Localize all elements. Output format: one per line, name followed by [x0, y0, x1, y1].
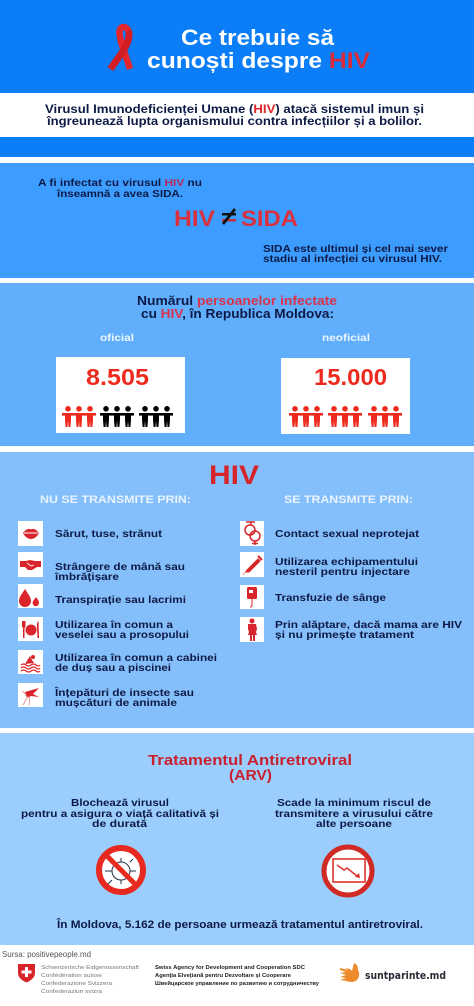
item: handshake: îmbrățișare	[54, 572, 119, 583]
icon: swiss shield	[18, 964, 35, 982]
text: Moldova count: În Moldova, 5.162 de persoane urmează tratamentul antiretroviral.	[56, 918, 423, 931]
text: blocks the virus: de durată	[92, 818, 147, 830]
item: syringe: nesteril pentru injectare	[275, 567, 410, 578]
item: breastfeeding mother	[240, 617, 462, 642]
text: HIV is not AIDS: înseamnă a avea SIDA.	[56, 189, 183, 200]
text: swiss agency: Agenția Elvețiană pentru Dezvoltare și Cooperare	[155, 973, 291, 979]
text: swiss confederation: Confederazione Svizzera	[41, 981, 113, 987]
text: swiss agency	[155, 965, 320, 987]
item: syringe	[240, 552, 418, 578]
icon: declining chart	[324, 847, 372, 895]
item: swimming	[18, 650, 217, 674]
heading: ARV	[148, 753, 352, 784]
title	[147, 25, 370, 73]
panel: header	[0, 0, 474, 93]
text: definition: Virusul Imunodeficienței Umane ( HIV) atacă sistemul imun și	[45, 104, 424, 116]
logo: suntparinte.md: suntparinte.md	[365, 970, 446, 982]
item: mosquito: mușcături de animale	[55, 698, 177, 709]
panel: antiretroviral treatment	[0, 733, 474, 945]
item: swimming: Utilizarea în comun a cabinei	[55, 653, 217, 664]
text: reduces transmission: alte persoane	[316, 818, 392, 830]
text: blocks the virus	[21, 797, 219, 830]
footer	[2, 950, 446, 995]
label: official: oficial	[100, 332, 134, 344]
card: unofficial count: 15.000	[314, 364, 387, 390]
heading: HIV not equal SIDA: SIDA	[241, 206, 298, 231]
item: sexual contact: Contact sexual neprotejat	[275, 529, 420, 540]
text: HIV is not AIDS	[38, 178, 202, 200]
item: mosquito: Înțepături de insecte sau	[54, 686, 194, 699]
heading: ARV: (ARV)	[229, 768, 272, 784]
heading: HIV not equal SIDA: HIV	[174, 206, 215, 231]
panel: transmission	[0, 452, 474, 728]
heading: number of infected	[137, 294, 337, 321]
item: breastfeeding mother: Prin alăptare, dacă mama are HIV	[275, 620, 462, 631]
text: SIDA definition: stadiu al infecției cu virusul HIV.	[263, 254, 442, 265]
panel: definition	[0, 93, 474, 137]
icon: virus blocked	[99, 848, 143, 892]
item: dishes	[18, 617, 189, 641]
heading: number of infected: Numărul persoanelor infectate	[137, 294, 337, 308]
item: breastfeeding mother: și nu primește tratament	[275, 630, 415, 641]
item: dishes: veselei sau a prosopului	[55, 630, 189, 641]
item: sexual contact	[240, 521, 420, 546]
text: HIV is not AIDS: A fi infectat cu virusul HIV nu	[38, 178, 202, 189]
heading: HIV: HIV	[209, 460, 259, 490]
title: Ce trebuie să	[181, 25, 335, 50]
item: drops	[18, 584, 186, 608]
item: swimming: de duș sau a piscinei	[55, 663, 171, 674]
text: blocks the virus: Blochează virusul	[71, 797, 169, 809]
item: syringe: Utilizarea echipamentului	[275, 557, 418, 568]
logo: suntparinte.md	[340, 963, 446, 982]
text: swiss confederation: Confédération suisse	[41, 973, 102, 979]
text: swiss confederation: Schweizerische Eidgenossenschaft	[41, 965, 139, 971]
item: kiss	[18, 521, 163, 546]
text: source: Sursa: positivepeople.md	[2, 950, 91, 959]
item: blood bag: Transfuzie de sânge	[275, 593, 386, 604]
panel: HIV vs SIDA	[0, 163, 474, 278]
heading: not transmitted: NU SE TRANSMITE PRIN:	[40, 494, 191, 506]
card: official count: 8.505	[86, 364, 149, 390]
text: swiss agency: Swiss Agency for Development and Cooperation SDC	[155, 965, 305, 971]
heading: HIV not equal SIDA	[174, 206, 298, 231]
heading: transmitted: SE TRANSMITE PRIN:	[284, 494, 413, 506]
text: swiss confederation: Confederaziun svizra	[41, 989, 103, 995]
icon: people	[62, 406, 173, 427]
text: definition	[45, 104, 424, 128]
text: swiss confederation	[41, 965, 139, 995]
text: definition: îngreunează lupta organismului contra infecțiilor și a bolilor.	[46, 116, 422, 128]
card: unofficial count	[281, 358, 410, 434]
item: handshake	[18, 552, 185, 583]
text: blocks the virus: pentru a asigura o viață calitativă și	[21, 808, 219, 820]
panel: number of infected people	[0, 283, 474, 446]
item: dishes: Utilizarea în comun a	[55, 620, 173, 631]
text: SIDA definition	[263, 244, 448, 265]
item: blood bag	[240, 585, 386, 609]
item: kiss: Sărut, tuse, strănut	[55, 529, 163, 540]
heading: number of infected: cu HIV, în Republica Moldova:	[141, 307, 334, 321]
item: handshake: Strângere de mână sau	[55, 562, 185, 573]
text: SIDA definition: SIDA este ultimul și cel mai sever	[263, 244, 448, 255]
title: cunoști despre HIV	[147, 48, 370, 73]
text: reduces transmission: transmitere a virusului către	[275, 808, 433, 820]
item: drops: Transpirație sau lacrimi	[55, 595, 186, 606]
card: official count	[56, 357, 185, 433]
item: mosquito	[18, 683, 194, 709]
icon: red ribbon	[110, 27, 130, 69]
text: reduces transmission: Scade la minimum riscul de	[277, 797, 431, 809]
text: reduces transmission	[275, 797, 433, 830]
heading: ARV: Tratamentul Antiretroviral	[148, 753, 352, 769]
text: swiss agency: Швейцарское управление по развитию и сотрудничеству	[155, 980, 320, 987]
label: unofficial: neoficial	[322, 332, 370, 344]
icon: people	[289, 406, 402, 427]
